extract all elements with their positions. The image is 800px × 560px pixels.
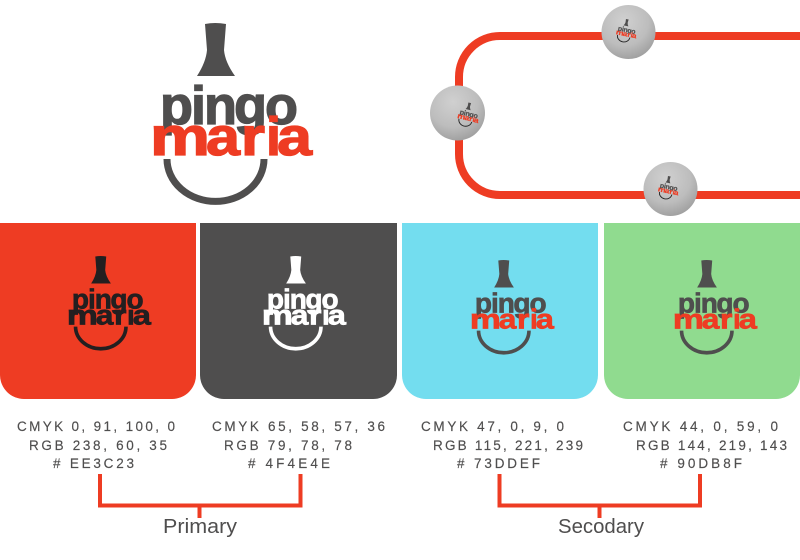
ball left: m (456, 111, 467, 122)
ball top: a (631, 33, 637, 40)
ball left: o (472, 111, 480, 121)
panel: cyan swatch (402, 223, 598, 399)
panel: red swatch: r (114, 300, 127, 331)
main logo (150, 23, 313, 201)
colour values: dark grey: CMYK 65, 58, 57, 36 (212, 419, 385, 434)
ball left: n (464, 109, 471, 119)
bracket: primary (98, 474, 302, 518)
colour values: cyan: # 73DDEF (457, 456, 540, 471)
colour values: dark grey: RGB 79, 78, 78 (224, 438, 352, 453)
ball top: i (621, 26, 624, 34)
ball top (602, 5, 656, 59)
ball bottom: n (665, 184, 670, 191)
panel: green swatch: p (678, 287, 695, 318)
ping pong track (459, 36, 800, 195)
panel: green swatch: i (694, 287, 702, 318)
main logo: i (191, 76, 206, 136)
panel: cyan swatch: m (470, 304, 501, 335)
ball left: a (464, 113, 471, 123)
main logo: a (277, 107, 313, 167)
ball bottom: a (664, 188, 670, 196)
panel: cyan swatch: a (536, 304, 554, 335)
ball top: n (623, 27, 628, 34)
panel: red swatch: a (133, 300, 151, 331)
panel: dark grey swatch: a (291, 300, 309, 331)
ball left: p (459, 107, 466, 117)
panel: green swatch: a (702, 304, 720, 335)
panel: cyan swatch: p (475, 287, 492, 318)
colour values: green: CMYK 44, 0, 59, 0 (623, 419, 778, 434)
panel: green swatch: o (733, 287, 750, 318)
panel: dark grey swatch: i (322, 300, 330, 331)
panel: red swatch (0, 223, 196, 399)
colour values: red: RGB 238, 60, 35 (29, 438, 167, 453)
colour values: red (17, 419, 175, 471)
ball left: a (473, 115, 481, 125)
ball left: i (472, 115, 476, 124)
main logo: r (241, 107, 265, 167)
ball top: r (627, 32, 631, 39)
colour values: green (623, 419, 787, 471)
panel: red swatch: p (72, 283, 89, 314)
ball top: i (630, 32, 633, 40)
panel: cyan swatch: i (530, 304, 538, 335)
colour values: red: # EE3C23 (53, 456, 134, 471)
colour values: cyan: RGB 115, 221, 239 (433, 438, 583, 453)
main logo: n (204, 76, 237, 136)
panel: dark grey swatch: g (305, 283, 323, 314)
panel: green swatch: i (733, 304, 741, 335)
label: secondary: Secodary (558, 516, 644, 538)
panel: dark grey swatch: o (321, 283, 339, 314)
ball top: p (617, 26, 623, 33)
panel: green swatch: a (739, 304, 757, 335)
main logo: o (265, 76, 298, 136)
ball bottom: a (673, 190, 679, 197)
panel: cyan swatch: n (498, 287, 515, 318)
ball top: m (615, 29, 624, 38)
ball left (430, 86, 485, 140)
ball top: g (627, 28, 632, 35)
ball bottom (644, 162, 698, 216)
panel: cyan swatch: a (499, 304, 517, 335)
ball top: o (630, 28, 636, 36)
colour values: green: # 90DB8F (660, 456, 742, 471)
colour values: cyan: CMYK 47, 0, 9, 0 (421, 419, 564, 434)
ball bottom: p (659, 183, 665, 190)
main logo: m (150, 107, 210, 167)
label: primary: Primary (163, 516, 237, 538)
panel: green swatch: n (701, 287, 718, 318)
ball bottom: i (663, 183, 666, 191)
panel: dark grey swatch: r (309, 300, 322, 331)
panel: red swatch: o (126, 283, 144, 314)
panel: dark grey swatch: i (283, 283, 291, 314)
panel: dark grey swatch: m (262, 300, 293, 331)
ball left: g (468, 110, 475, 120)
panel: green swatch (604, 223, 800, 399)
main logo: a (206, 107, 241, 167)
ball bottom: r (669, 189, 673, 196)
panel: red swatch: m (67, 300, 98, 331)
panel: red swatch: g (110, 283, 128, 314)
panel: dark grey swatch (200, 223, 397, 399)
bracket: secondary (498, 474, 702, 518)
ball left: r (468, 114, 474, 124)
panel: cyan swatch: o (530, 287, 547, 318)
panel: green swatch: r (720, 304, 733, 335)
main logo: i (266, 107, 281, 167)
ball left: i (463, 108, 467, 118)
panel: red swatch: i (88, 283, 96, 314)
ball bottom: i (672, 189, 675, 197)
colour values: cyan (421, 419, 583, 471)
colour values: dark grey: # 4F4E4E (248, 456, 330, 471)
panel: dark grey swatch: a (328, 300, 346, 331)
panel: red swatch: a (96, 300, 114, 331)
panel: red swatch: i (127, 300, 135, 331)
colour values: dark grey (212, 419, 385, 471)
main logo: p (160, 76, 193, 136)
panel: red swatch: n (95, 283, 112, 314)
colour values: red: CMYK 0, 91, 100, 0 (17, 419, 175, 434)
ball top: a (622, 31, 628, 39)
panel: cyan swatch: g (513, 287, 531, 318)
panel: dark grey swatch: p (267, 283, 284, 314)
main logo: g (234, 76, 267, 136)
panel: cyan swatch: r (517, 304, 530, 335)
panel: dark grey swatch: n (290, 283, 307, 314)
ball bottom: o (672, 185, 678, 193)
panel: cyan swatch: i (491, 287, 499, 318)
ball bottom: m (657, 186, 666, 195)
colour values: green: RGB 144, 219, 143 (636, 438, 787, 453)
ball bottom: g (669, 185, 674, 192)
panel: green swatch: m (673, 304, 704, 335)
panel: green swatch: g (716, 287, 734, 318)
